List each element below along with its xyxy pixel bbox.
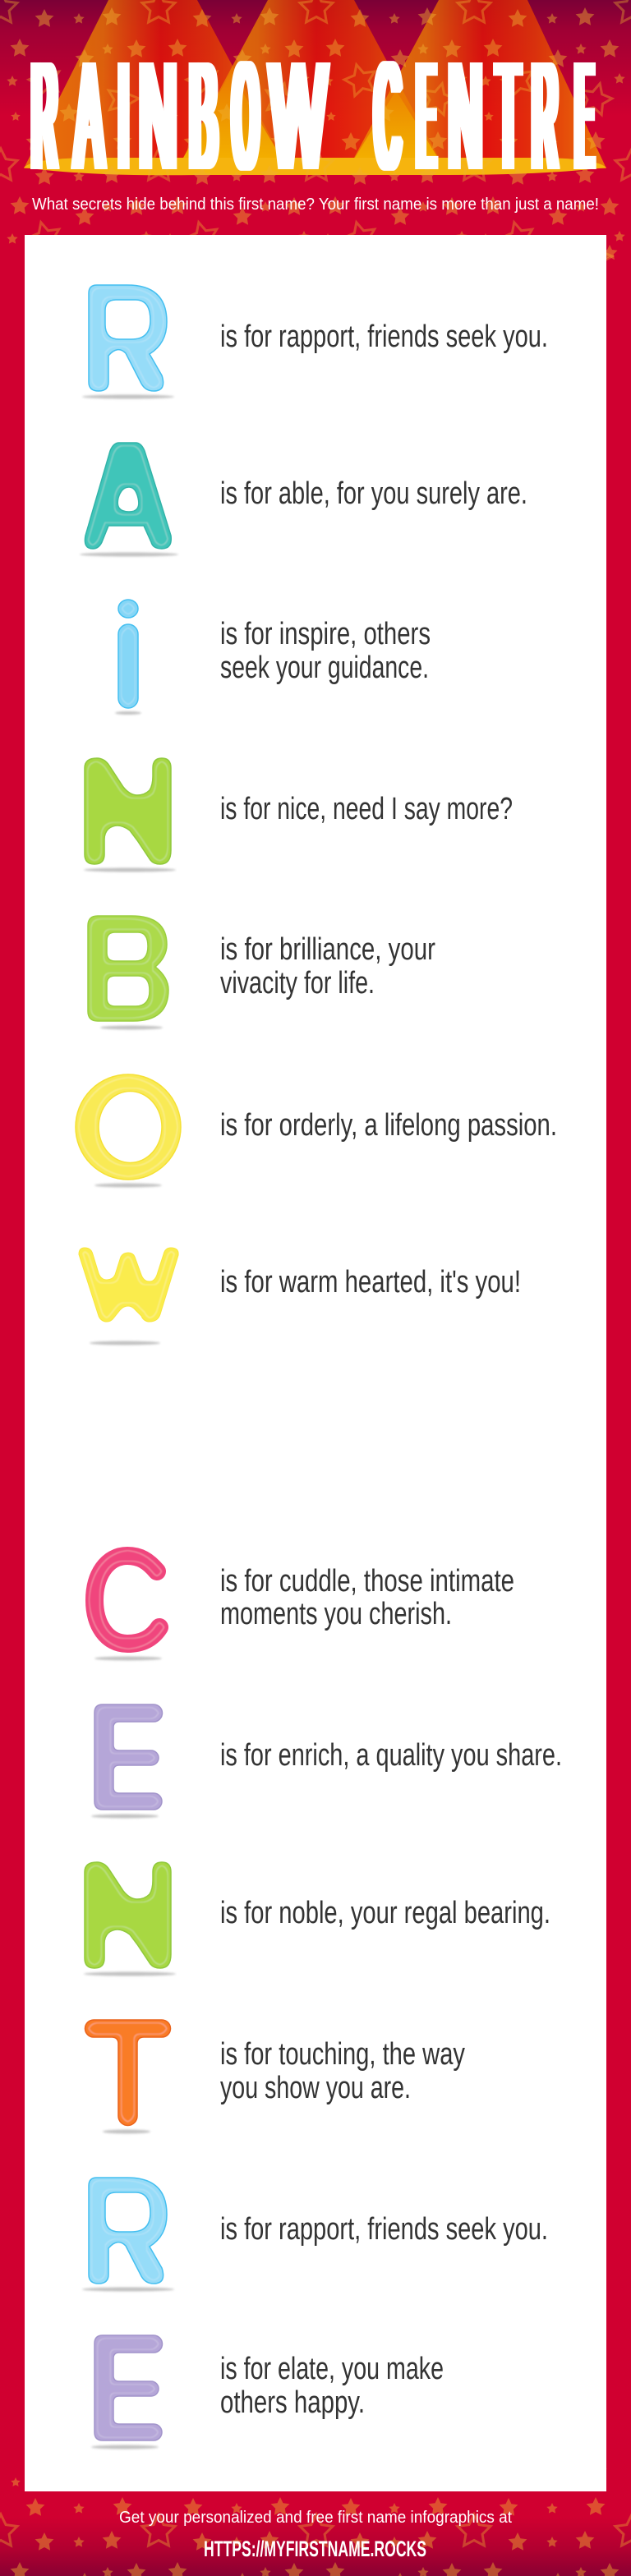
row: E bbox=[91, 1704, 562, 1819]
title bbox=[32, 31, 592, 201]
text: brilliance: vivacity for life. bbox=[220, 966, 375, 1000]
subtitle: What secrets hide behind this first name? Your first name is more than just a name! bbox=[32, 196, 599, 214]
title: O bbox=[233, 31, 258, 201]
text: touching bbox=[220, 2037, 465, 2105]
title: R bbox=[32, 31, 57, 201]
spotlights bbox=[24, 0, 606, 175]
text: elate bbox=[220, 2352, 444, 2420]
row: I bbox=[115, 600, 431, 715]
title: C bbox=[375, 31, 400, 201]
row: O bbox=[76, 1074, 557, 1188]
icon: letter R bbox=[82, 2178, 174, 2292]
row: R bbox=[82, 285, 548, 399]
row: E (second) bbox=[91, 2335, 444, 2450]
row: A bbox=[80, 443, 527, 557]
icon: letter C bbox=[94, 1556, 162, 1661]
icon: letter R bbox=[82, 285, 174, 399]
text: able: is for able, for you surely are. bbox=[220, 476, 527, 511]
title: T bbox=[496, 31, 520, 201]
footer url: HTTPS://MYFIRSTNAME.ROCKS bbox=[204, 2537, 426, 2561]
row: R (second) bbox=[82, 2178, 548, 2292]
text: elate: is for elate, you make bbox=[220, 2352, 444, 2386]
text: touching: is for touching, the way bbox=[220, 2037, 465, 2072]
icon: letter E bbox=[91, 1704, 163, 1819]
row: B bbox=[88, 916, 435, 1030]
icon: letter i bbox=[115, 600, 141, 715]
title: N bbox=[140, 31, 177, 201]
icon: letter T bbox=[85, 2020, 171, 2134]
text: inspire: is for inspire, others bbox=[220, 617, 431, 651]
title: I bbox=[119, 31, 128, 201]
icon: letter W bbox=[79, 1248, 178, 1346]
text: warm hearted: is for warm hearted, it's you! bbox=[220, 1265, 521, 1300]
footer text: Get your personalized and free first name infographics at bbox=[119, 2509, 512, 2527]
row: W bbox=[79, 1248, 521, 1346]
text: cuddle: moments you cherish. bbox=[220, 1597, 452, 1631]
text: cuddle bbox=[220, 1564, 514, 1631]
title: B bbox=[190, 31, 217, 201]
icon: letter A bbox=[80, 443, 178, 557]
text: brilliance bbox=[220, 932, 435, 1000]
title: E bbox=[417, 31, 435, 201]
title: W bbox=[270, 31, 326, 201]
text: inspire: seek your guidance. bbox=[220, 651, 429, 685]
title: N bbox=[449, 31, 482, 201]
title: A bbox=[76, 31, 104, 201]
text: nice: is for nice, need I say more? bbox=[220, 792, 513, 826]
text: brilliance: is for brilliance, your bbox=[220, 932, 435, 967]
row: N bbox=[84, 758, 513, 872]
row: T bbox=[85, 2020, 465, 2134]
text: elate: others happy. bbox=[220, 2385, 365, 2420]
icon: letter N bbox=[84, 758, 176, 872]
icon: letter O bbox=[76, 1074, 181, 1188]
icon: letter N bbox=[84, 1862, 176, 1976]
text: cuddle: is for cuddle, those intimate bbox=[220, 1564, 514, 1598]
icon: letter B bbox=[88, 916, 168, 1030]
row: N (second) bbox=[84, 1862, 550, 1976]
row: C bbox=[94, 1556, 514, 1661]
text: touching: you show you are. bbox=[220, 2071, 411, 2105]
text: inspire bbox=[220, 617, 431, 685]
icon: letter E bbox=[91, 2335, 163, 2450]
